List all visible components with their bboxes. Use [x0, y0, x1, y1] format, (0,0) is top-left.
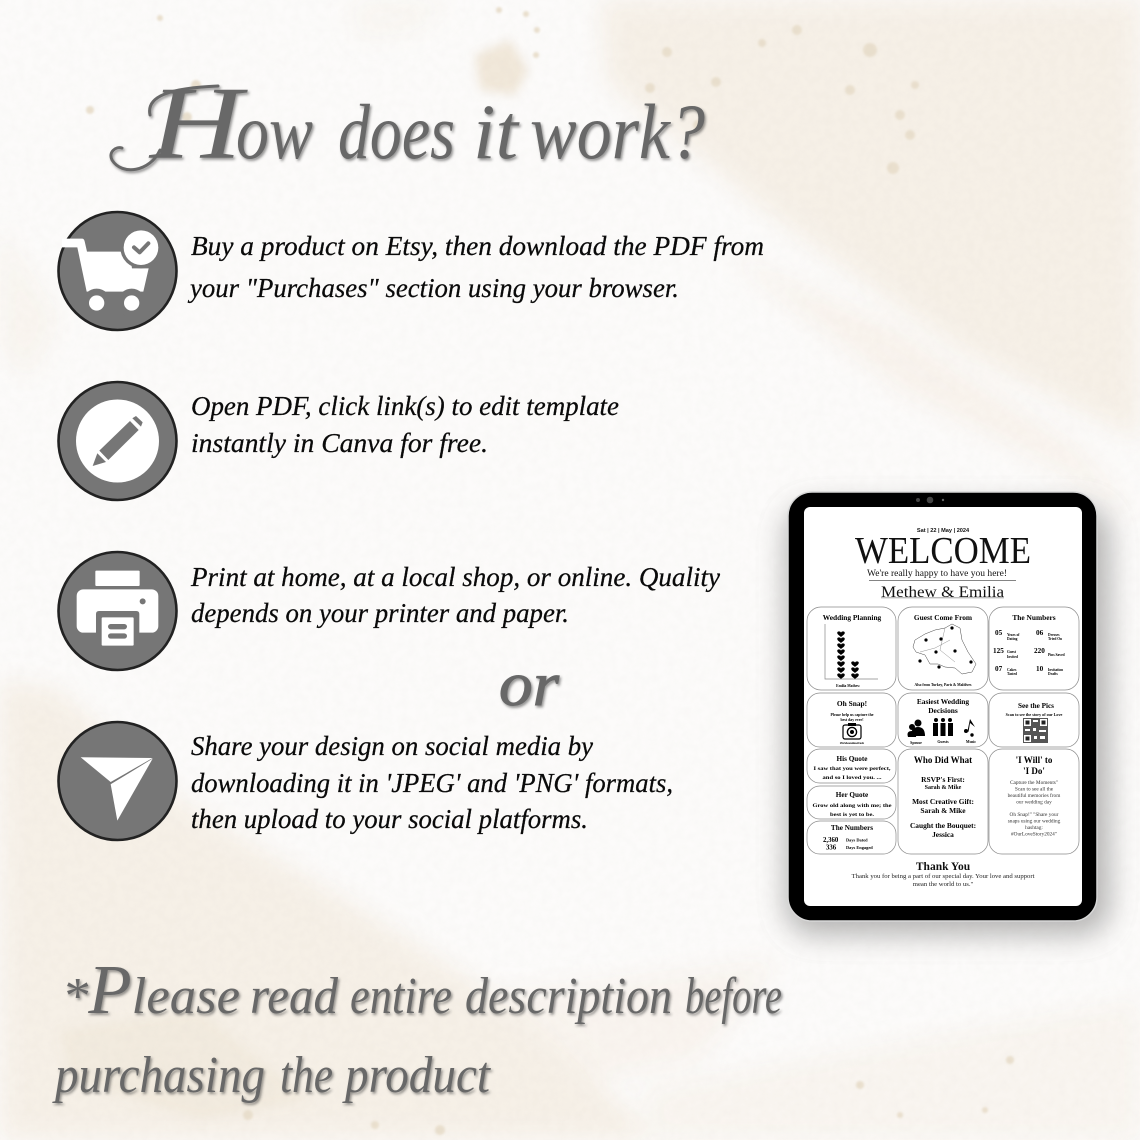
card: easiest wedding decisions: Decisions: [928, 706, 958, 715]
card: easiest wedding decisions: Spouse: [910, 741, 922, 745]
card: the numbers: 220: [1034, 647, 1045, 655]
tablet shadow: [785, 505, 1110, 935]
card: i will to i do: Oh Snap!" "Share your: [1010, 812, 1059, 818]
invitation header: We're really happy to have you here!: [867, 568, 1007, 579]
card: i will to i do: 'I Will' to: [1016, 755, 1053, 765]
card: i will to i do: #OurLoveStory2024": [1011, 832, 1057, 838]
footer note: purchasing: [51, 1047, 265, 1104]
card: the numbers small: Days Dated: [846, 838, 868, 842]
card: see the pics: Scan to see the story of our Love: [1006, 712, 1063, 717]
step 4 text: Share your design on social media by: [191, 731, 593, 761]
card: see the pics: [989, 693, 1079, 747]
footer note: description: [465, 968, 672, 1025]
card: wedding planning: Emilia Mathew: [836, 684, 860, 688]
card: the numbers: Dresses: [1048, 633, 1060, 637]
footer note: *Please: [62, 952, 240, 1029]
card: the numbers: Pins Saved: [1048, 653, 1065, 657]
title: [111, 66, 705, 181]
invitation header: WELCOME: [855, 530, 1031, 572]
card: i will to i do: snaps using our wedding: [1008, 818, 1061, 824]
title: does: [338, 88, 455, 175]
thank you: Thank You: [916, 861, 971, 873]
step 4 text: downloading it in 'JPEG' and 'PNG' formats,: [191, 768, 673, 798]
card: oh snap: [807, 693, 896, 747]
step 1 text: Buy a product on Etsy, then download the PDF from: [191, 231, 764, 261]
card: oh snap: best day ever!: [840, 718, 864, 722]
card: the numbers: Guest: [1007, 650, 1017, 654]
step 1 text: your "Purchases" section using your browser.: [187, 273, 679, 303]
invitation header: Sat | 22 | May | 2024: [917, 528, 970, 534]
card: his quote: and so I loved you. ...: [822, 775, 882, 781]
footer note: the: [280, 1047, 333, 1104]
card: her quote: Her Quote: [836, 791, 868, 799]
card: the numbers: 125: [993, 647, 1004, 655]
card: i will to i do: Scan to see all the: [1015, 786, 1054, 792]
card: i will to i do: our wedding day: [1016, 800, 1052, 806]
step 3 text: Print at home, at a local shop, or online. Quality: [190, 562, 720, 592]
card: i will to i do: [989, 749, 1079, 854]
step 2 text: [191, 391, 619, 458]
title: it: [473, 88, 520, 175]
card: who did what: Caught the Bouquet:: [910, 821, 976, 830]
card: i will to i do: hashtag:: [1025, 825, 1043, 831]
invitation header: Methew & Emilia: [881, 584, 1004, 601]
card: who did what: Most Creative Gift:: [912, 797, 974, 806]
card: the numbers: Dating: [1007, 637, 1018, 641]
step 1 text: [187, 231, 764, 303]
step 3 text: depends on your printer and paper.: [191, 598, 569, 628]
card: his quote: [807, 749, 896, 783]
card: the numbers: Invited: [1007, 655, 1018, 659]
card: who did what: Jessica: [932, 830, 954, 839]
step 3: printer icon: [58, 552, 176, 670]
step 2 text: instantly in Canva for free.: [191, 428, 488, 458]
card: who did what: RSVP's First:: [921, 775, 965, 784]
card: easiest wedding decisions: Music: [966, 740, 976, 744]
footer note: read: [250, 968, 339, 1025]
card: the numbers small: [807, 821, 896, 854]
card: the numbers small: The Numbers: [831, 824, 873, 832]
card: her quote: Grow old along with me; the: [812, 803, 892, 809]
thank you: [852, 861, 1035, 888]
tablet mockup: [788, 492, 1097, 921]
card: i will to i do: Capture the Moments": [1010, 780, 1058, 786]
card: the numbers: Tried On: [1048, 637, 1062, 641]
card: the numbers: Invitation: [1048, 668, 1063, 672]
card: his quote: His Quote: [837, 755, 867, 763]
card: oh snap: Please help us capture the: [831, 713, 874, 717]
step 2: pencil icon: [58, 382, 176, 500]
card: the numbers: 10: [1036, 665, 1044, 673]
card: who did what: Sarah & Mike: [925, 785, 962, 791]
card: who did what: Who Did What: [914, 755, 972, 765]
card: the numbers: 05: [995, 629, 1003, 637]
card: the numbers: 06: [1036, 629, 1044, 637]
step 1: cart icon: [58, 212, 176, 330]
card: who did what: [898, 749, 988, 854]
footer note: [51, 952, 782, 1104]
card: her quote: [807, 786, 896, 819]
card: the numbers: 07: [995, 665, 1003, 673]
footer note: entire: [350, 968, 452, 1025]
invitation header: [855, 528, 1031, 601]
card: the numbers: Cakes: [1007, 668, 1017, 672]
card: see the pics: See the Pics: [1018, 702, 1054, 710]
thank you: Thank you for being a part of our special day. Your love and support: [852, 873, 1035, 880]
step 2 text: Open PDF, click link(s) to edit template: [191, 391, 619, 421]
card: easiest wedding decisions: [898, 693, 988, 747]
card: the numbers small: 2,360: [823, 837, 839, 844]
card: guest come from: Also from Turkey, Paris & Maldives: [915, 683, 972, 687]
card: oh snap: #brideandmefresh: [840, 741, 864, 745]
icon: qr code: [1023, 718, 1048, 743]
card: the numbers small: 336: [826, 844, 837, 852]
card: the numbers: Years of: [1007, 633, 1020, 637]
card: the numbers: [989, 607, 1079, 690]
step 3 text: [190, 562, 720, 628]
thank you: mean the world to us.": [913, 881, 974, 888]
card: the numbers: The Numbers: [1012, 613, 1056, 622]
step 4 text: [191, 731, 673, 834]
card: the numbers: Tasted: [1007, 672, 1017, 676]
card: easiest wedding decisions: Guests: [937, 740, 949, 744]
title: ow: [236, 88, 313, 175]
card: the numbers: Drafts: [1048, 672, 1058, 676]
card: who did what: Sarah & Mike: [920, 806, 966, 815]
card: guest come from: [898, 607, 988, 690]
card: oh snap: Oh Snap!: [837, 699, 867, 708]
card: her quote: best is yet to be.: [830, 812, 875, 818]
card: guest come from: Guest Come From: [914, 613, 973, 622]
title: work?: [530, 88, 705, 175]
footer note: product: [341, 1047, 491, 1104]
card: i will to i do: 'I Do': [1023, 766, 1045, 776]
step 4 text: then upload to your social platforms.: [191, 804, 588, 834]
card: the numbers small: Days Engaged: [846, 845, 873, 850]
card: easiest wedding decisions: Easiest Wedding: [917, 697, 969, 706]
title: H: [148, 66, 248, 181]
step 4: paper plane icon: [58, 722, 176, 840]
or label: or: [499, 651, 560, 719]
footer note: before: [685, 968, 782, 1025]
card: his quote: I saw that you were perfect,: [814, 766, 891, 772]
card: wedding planning: Wedding Planning: [823, 613, 882, 622]
card: i will to i do: beautiful memories from: [1008, 792, 1061, 799]
card: wedding planning: [807, 607, 896, 690]
